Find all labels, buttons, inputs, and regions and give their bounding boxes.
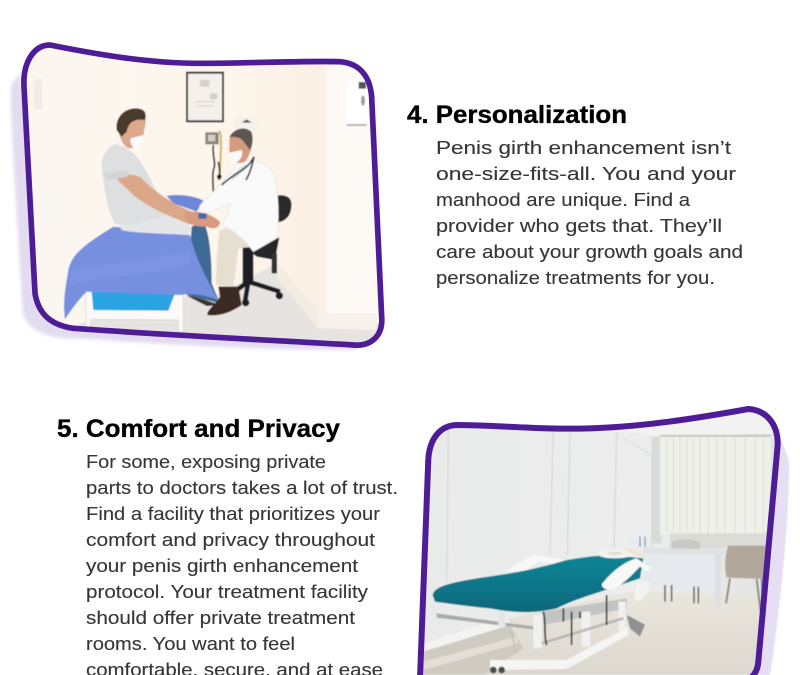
patient's arm: [115, 174, 199, 225]
white armrest left: [505, 554, 563, 572]
text block: personalization body: manhood are unique. Find a: [436, 190, 691, 210]
text block: comfort and privacy body: comfort and privacy throughout: [86, 530, 375, 550]
text block: comfort and privacy body: parts to doctors takes a lot of trust.: [86, 478, 398, 498]
wall monitor: [234, 118, 251, 129]
text block: comfort and privacy body: [86, 452, 398, 675]
decorative lavender backing shape: [757, 412, 789, 675]
doctor's head with mask: [229, 129, 253, 163]
white headrest and arm pads: [602, 558, 652, 590]
patient's jeans and shoes: [187, 222, 220, 303]
patient's trousers: [118, 215, 192, 235]
framed certificate: [187, 73, 223, 121]
text block: comfort and privacy body: For some, exposing private: [86, 452, 326, 472]
doctor's white coat: [199, 161, 278, 252]
wall fixtures: [33, 78, 43, 110]
photo: private treatment room: [417, 408, 789, 675]
heading: 5. Comfort and Privacy: 5. Comfort and Privacy: [57, 415, 340, 443]
text block: personalization body: provider who gets that. They’ll: [436, 216, 722, 236]
decorative lavender backing shape: [11, 73, 367, 350]
purple frame: [420, 409, 778, 675]
heading: 4. Personalization: 4. Personalization: [407, 101, 627, 129]
floor: [484, 592, 760, 675]
patient's torso in grey shirt: [102, 144, 170, 225]
floor: [80, 266, 378, 342]
doctor's stool: [275, 195, 292, 223]
treatment bed base: [437, 581, 650, 673]
teal mattress: [433, 555, 643, 612]
text block: comfort and privacy body: protocol. Your treatment facility: [86, 582, 368, 602]
hands: [185, 212, 220, 228]
text block: comfort and privacy body: rooms. You want to feel: [86, 634, 295, 654]
ceiling: [676, 412, 774, 434]
patient's head with mask: [117, 109, 146, 148]
photo: patient and doctor in an exam room: [11, 40, 390, 350]
text block: personalization body: [436, 138, 743, 288]
window blinds: [660, 435, 771, 535]
desk: [638, 536, 721, 606]
purple frame: [24, 45, 382, 345]
text block: comfort and privacy body: your penis girth enhancement: [86, 556, 358, 576]
chairs: [672, 540, 700, 549]
wall panel seams: [447, 428, 617, 582]
text block: personalization body: one-size-fits-all. You and your: [436, 164, 736, 184]
text block: personalization body: Penis girth enhancement isn’t: [436, 138, 731, 158]
text block: personalization body: personalize treatments for you.: [436, 268, 715, 288]
text block: comfort and privacy body: should offer private treatment: [86, 608, 355, 628]
text block: personalization body: care about your growth goals and: [436, 242, 743, 262]
exam table and drape: [86, 290, 183, 332]
text block: comfort and privacy body: Find a facility that prioritizes your: [86, 504, 380, 524]
doctor's trousers and shoes: [216, 228, 250, 287]
